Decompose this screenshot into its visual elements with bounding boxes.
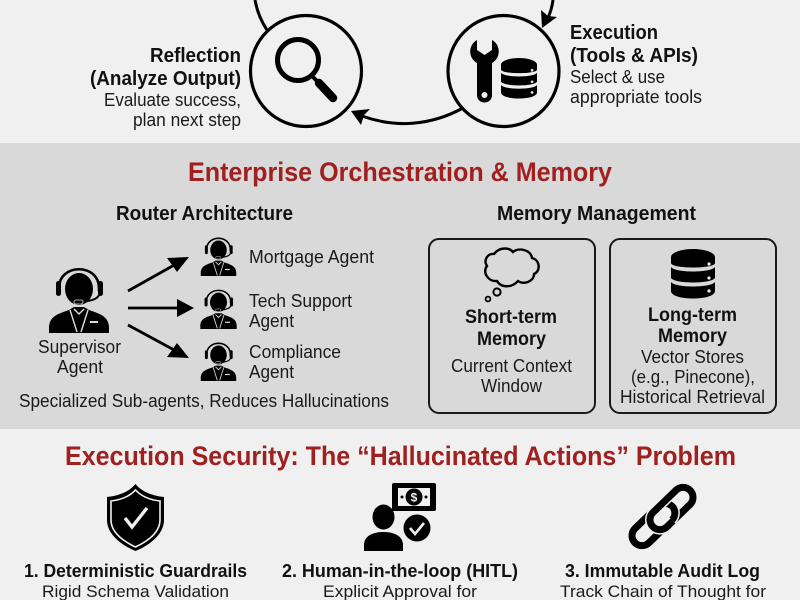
column: human in the loop [282,561,518,600]
icon: mortgage agent [201,238,236,276]
text: long-term memory: Long-term [648,305,737,326]
column: human in the loop: 2. Human-in-the-loop (HITL) [282,561,518,581]
text: long-term memory: Memory [658,326,727,347]
label: tech support agent [249,291,352,331]
text: reflection: (Analyze Output) [90,68,241,90]
label: supervisor agent: Agent [57,357,103,377]
label: compliance agent: Agent [249,362,294,382]
panel: enterprise orchestration and memory [0,143,800,429]
text: short-term memory [451,307,572,396]
heading: execution security: Execution Security: The “Hallucinated Actions” Problem [65,441,736,471]
column: deterministic guardrails [24,561,247,600]
label: supervisor agent [38,337,121,377]
text: short-term memory: Window [481,376,543,396]
text: execution: appropriate tools [570,87,702,107]
icon: database [671,249,715,298]
text: reflection: Evaluate success, [104,90,241,110]
text: execution [570,22,702,107]
text: short-term memory: Memory [477,329,546,350]
label: tech support agent: Agent [249,311,294,331]
text: execution: Select & use [570,67,665,87]
text: short-term memory: Short-term [465,307,557,328]
text: long-term memory: (e.g., Pinecone), [631,367,755,387]
text: long-term memory: Vector Stores [641,347,744,367]
text: execution: (Tools & APIs) [570,45,698,67]
icon: supervisor agent [49,269,109,333]
icon: compliance agent [201,343,236,381]
heading: memory management: Memory Management [497,203,696,225]
column: deterministic guardrails: 1. Deterministic Guardrails [24,561,247,581]
icon: chain link [628,483,697,550]
arrow: planning to execution [541,0,557,28]
text: reflection: Reflection [150,45,241,67]
arrow: into reflection from above [255,0,267,30]
column: immutable audit log: 3. Immutable Audit Log [565,561,760,581]
arrow: to compliance agent [128,325,189,358]
label: mortgage agent: Mortgage Agent [249,247,374,267]
column: immutable audit log [560,561,766,600]
heading: enterprise orchestration: Enterprise Orchestration & Memory [188,157,612,187]
text: long-term memory: Historical Retrieval [620,387,765,407]
icon: execution wrench and database [448,16,559,126]
text: reflection [90,45,241,130]
icon: tech support agent [200,290,237,329]
icon: human approval: $ [411,490,418,504]
text: long-term memory [620,305,765,407]
label: compliance agent: Compliance [249,342,341,362]
icon: shield [107,484,164,551]
arrow: to tech support agent [128,299,194,317]
caption: router benefit: Specialized Sub-agents, Reduces Hallucinations [19,391,389,411]
label: compliance agent [249,342,341,382]
label: tech support agent: Tech Support [249,291,352,311]
panel: execution security [24,441,766,600]
heading: router architecture: Router Architecture [116,203,293,225]
icon: thought cloud [485,248,539,301]
arrow: to mortgage agent [128,257,189,291]
icon: reflection magnifying glass [250,16,362,126]
label: supervisor agent: Supervisor [38,337,121,357]
panel: short-term memory [429,239,595,413]
text: execution: Execution [570,22,658,44]
panel: long-term memory [610,239,776,413]
text: short-term memory: Current Context [451,356,572,376]
text: reflection: plan next step [133,110,241,130]
panel: agent loop [90,0,702,130]
icon: human approval [364,483,436,551]
arrow: execution to reflection [351,108,463,125]
